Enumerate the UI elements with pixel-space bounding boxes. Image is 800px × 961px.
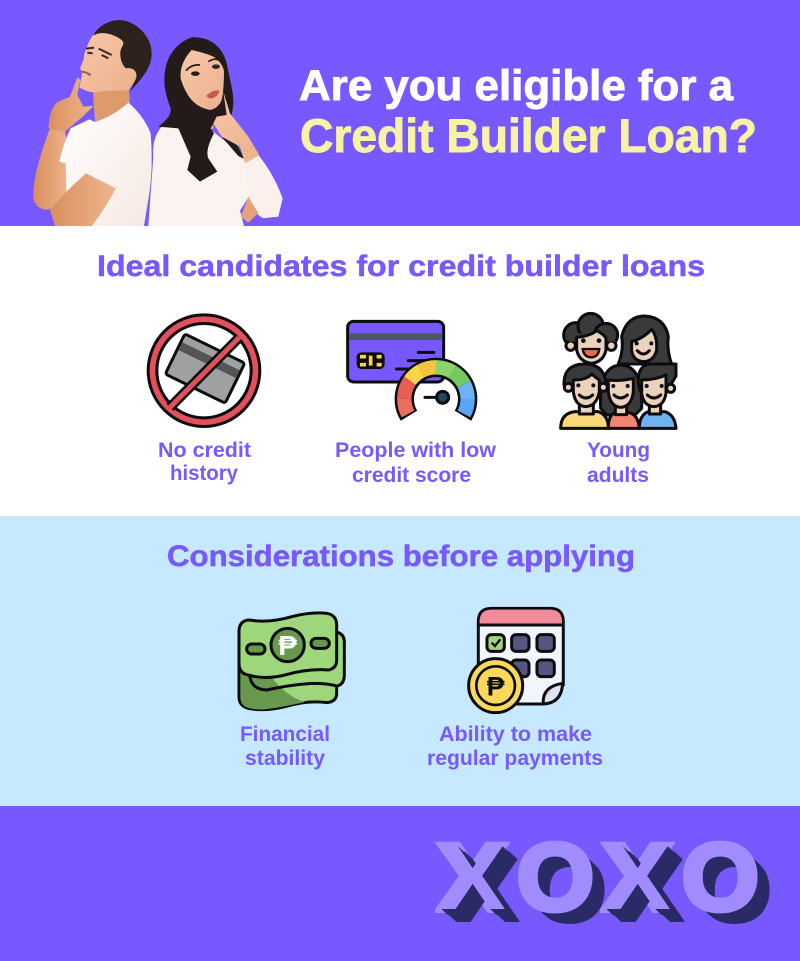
title line 1: Are you eligible for a <box>299 62 734 110</box>
blue panel: considerations <box>0 516 800 806</box>
logo: XOXO: X <box>605 827 671 929</box>
white panel: ideal candidates <box>0 226 800 516</box>
label: people with low credit score: People with low <box>335 439 497 462</box>
logo: XOXO: X <box>440 827 506 929</box>
label: ability to make regular payments: Ability to make <box>439 723 592 746</box>
label: people with low credit score <box>335 439 497 487</box>
top right person <box>618 316 672 364</box>
label: young adults: adults <box>587 464 649 487</box>
footer panel <box>0 806 800 961</box>
label: young adults <box>587 439 650 487</box>
title line 2: Credit Builder Loan? <box>300 109 757 162</box>
bottom right person <box>638 364 676 428</box>
heading: ideal candidates: Ideal candidates for credit builder loans <box>97 250 705 283</box>
top left person <box>564 313 618 350</box>
icon: peso bills <box>239 613 344 710</box>
icon: calendar with peso coin <box>469 608 563 713</box>
bottom middle person <box>600 365 642 428</box>
logo: XOXO: O <box>682 824 759 931</box>
man <box>33 20 152 226</box>
icon: low credit score <box>348 321 468 416</box>
icon: young adults <box>561 313 676 428</box>
credit gauge <box>404 367 468 416</box>
bottom left person <box>561 364 608 428</box>
label: ability to make regular payments <box>427 723 603 770</box>
heading: considerations: Considerations before applying <box>167 540 635 573</box>
label: financial stability: Financial <box>240 723 330 746</box>
title <box>299 62 757 162</box>
icon: no credit history <box>147 313 261 428</box>
logo: XOXO: O <box>517 824 594 931</box>
icon: calendar with peso coin: ₱ <box>487 672 505 702</box>
label: young adults: Young <box>587 439 650 462</box>
photo: thinking couple <box>33 20 283 226</box>
icon: peso bills: ₱ <box>278 630 297 661</box>
label: ability to make regular payments: regular payments <box>427 747 603 770</box>
label: financial stability: stability <box>245 747 325 770</box>
label: people with low credit score: credit score <box>352 464 471 487</box>
label: no credit history: No credit <box>158 439 251 462</box>
label: no credit history <box>158 439 251 485</box>
label: financial stability <box>240 723 330 770</box>
header panel <box>0 0 800 226</box>
label: no credit history: history <box>170 462 238 485</box>
logo: XOXO <box>435 824 770 931</box>
woman <box>148 37 283 226</box>
